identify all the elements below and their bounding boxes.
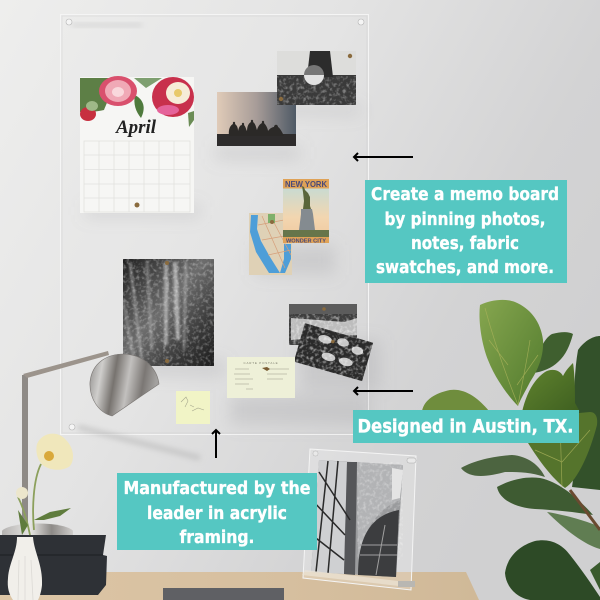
sticky note	[176, 391, 210, 424]
books	[0, 535, 107, 595]
leaf: lower horizontal	[497, 477, 593, 515]
calendar florals	[80, 76, 194, 127]
leaf: bottom	[505, 540, 600, 600]
plant stem	[570, 490, 600, 530]
callout: memo board: Create a memo board	[371, 184, 559, 205]
postcard note	[227, 357, 295, 398]
standoff pins	[66, 19, 364, 430]
photo: black and white abstract	[123, 259, 214, 366]
calendar	[80, 76, 194, 213]
leaf: mid	[522, 363, 580, 412]
arrow: manufactured	[212, 430, 220, 458]
lamp	[2, 351, 159, 548]
frame photo	[311, 460, 403, 577]
callout: manufactured: Manufactured by the	[124, 478, 310, 499]
arrow: designed in Austin	[354, 387, 413, 395]
acrylic panel	[60, 14, 380, 458]
leaf: lower right	[547, 512, 600, 549]
postcard: New York	[283, 179, 329, 244]
desk	[0, 572, 479, 600]
callout: designed in Austin	[353, 410, 579, 443]
acrylic frame with photo	[302, 449, 416, 590]
callout: memo board: by pinning photos,	[384, 209, 546, 230]
arrow: memo board	[354, 153, 413, 161]
postcard note: CARTE POSTALE	[244, 361, 278, 365]
leaf: far dark	[533, 332, 573, 373]
callout: manufactured: framing.	[180, 527, 254, 548]
leaf: left small	[422, 390, 489, 411]
callout: memo board	[365, 180, 567, 283]
photo: rooftop	[289, 304, 357, 345]
plant	[422, 300, 600, 600]
callout: memo board: swatches, and more.	[376, 257, 554, 278]
leaf: right dark rear	[572, 336, 600, 490]
calendar grid	[84, 141, 190, 212]
photo: crystal ball	[277, 51, 356, 105]
photo: silhouettes	[217, 92, 296, 146]
callout: manufactured	[117, 473, 317, 550]
leaf: left horizontal	[461, 455, 545, 477]
panel shadows on wall	[85, 105, 380, 425]
postcard: New York: NEW YORK	[285, 180, 327, 189]
callout: memo board: notes, fabric	[411, 233, 519, 254]
callout: manufactured: leader in acrylic	[147, 503, 287, 524]
calendar title: April	[115, 117, 157, 138]
fabric swatch	[294, 323, 373, 381]
flower and vase	[8, 434, 73, 600]
postcard: New York: WONDER CITY	[286, 238, 326, 244]
leaf: large center	[528, 412, 597, 488]
postcard: map	[249, 213, 292, 275]
leaf: big top	[479, 300, 543, 406]
